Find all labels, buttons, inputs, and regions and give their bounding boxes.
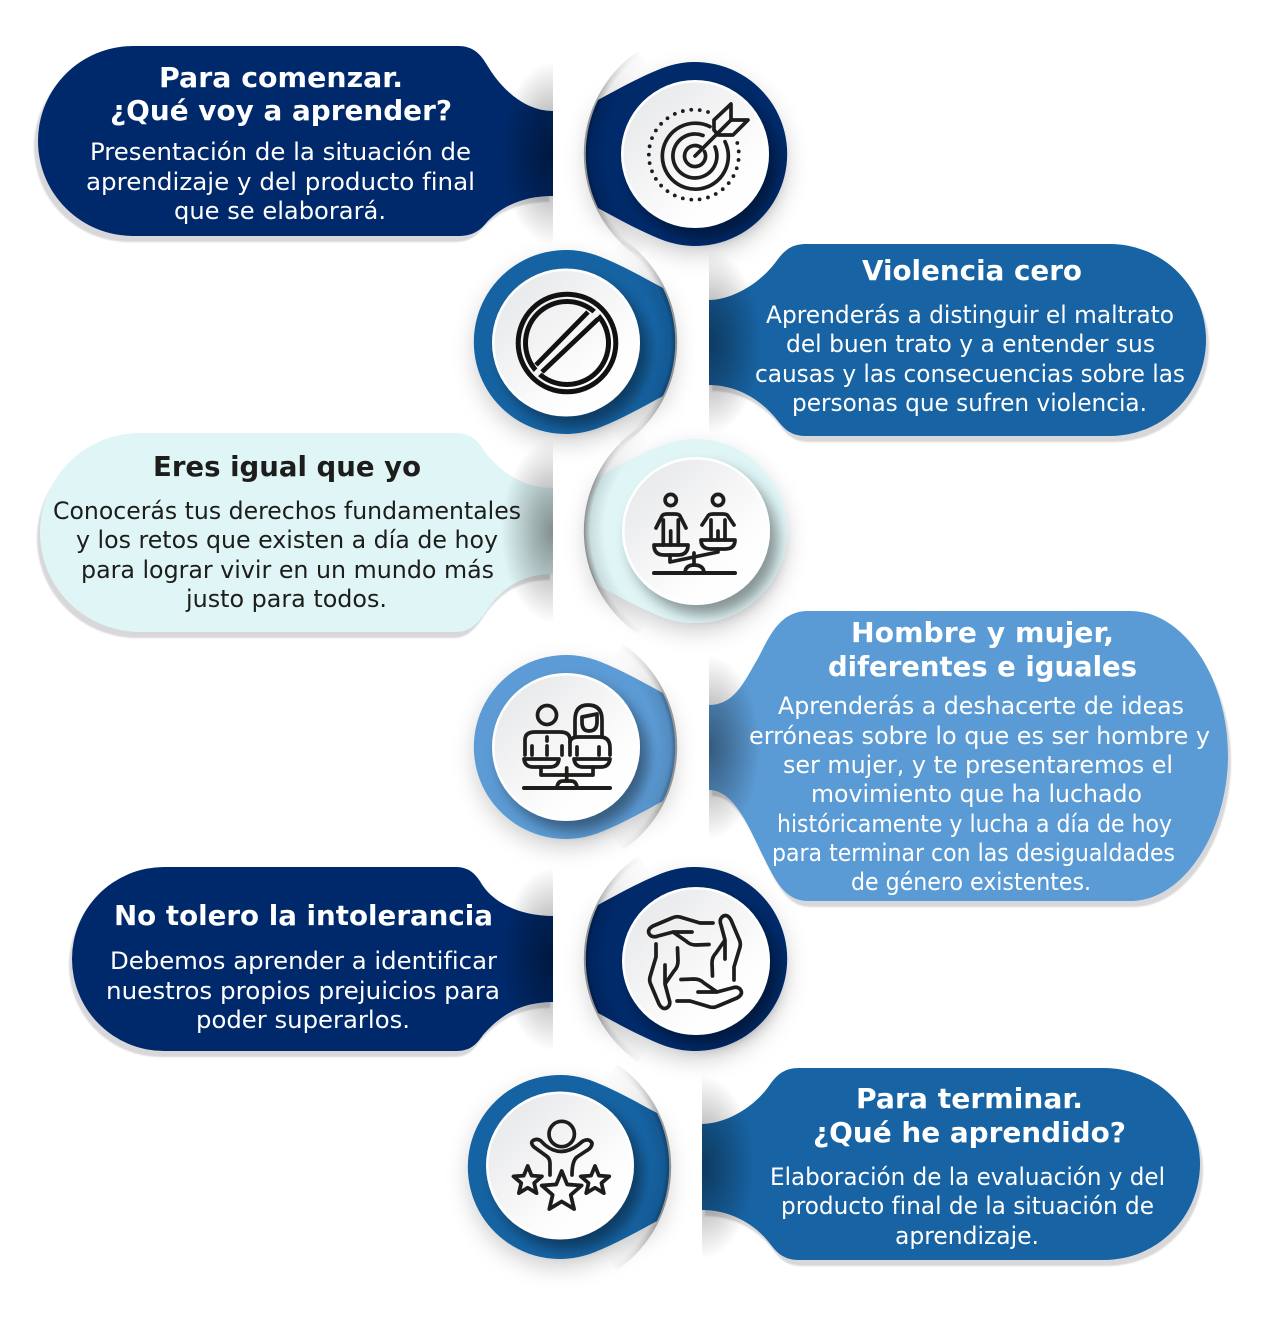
panel: para comenzar [34, 46, 553, 246]
text: no tolero la intolerancia [106, 947, 500, 1034]
text: eres igual que yo: para lograr vivir en un mundo más [81, 556, 494, 584]
panel: hombre y mujer [709, 611, 1231, 907]
text: no tolero la intolerancia: poder superarlos. [196, 1006, 410, 1034]
circle: target [584, 51, 787, 257]
circle: achievement [468, 1064, 671, 1270]
text: hombre y mujer: Aprenderás a deshacerte de ideas [778, 692, 1184, 720]
text: eres igual que yo: y los retos que existen a día de hoy [76, 526, 498, 554]
heading: hombre y mujer: Hombre y mujer, [851, 616, 1114, 649]
text: hombre y mujer: para terminar con las desigualdades [772, 839, 1175, 867]
heading: para terminar [813, 1082, 1126, 1149]
panel: eres igual que yo [37, 433, 553, 638]
icon: person with three stars [513, 1121, 609, 1209]
text: hombre y mujer: ser mujer, y te presentaremos el [783, 751, 1173, 779]
icon: man and woman on scale [524, 705, 610, 788]
panel: violencia cero [709, 244, 1209, 442]
panel: para terminar [702, 1068, 1203, 1266]
heading: hombre y mujer: diferentes e iguales [828, 650, 1137, 683]
heading: para comenzar [110, 61, 452, 127]
text: eres igual que yo: justo para todos. [185, 585, 387, 613]
circle: hands [584, 856, 787, 1062]
text: para terminar: aprendizaje. [895, 1222, 1039, 1250]
text: violencia cero: del buen trato y a entender sus [786, 330, 1155, 358]
icon: two people on seesaw [654, 494, 735, 573]
heading: para comenzar: Para comenzar. [159, 61, 403, 94]
text: para comenzar: aprendizaje y del producto final [86, 168, 475, 196]
text: para terminar: Elaboración de la evaluación y del [770, 1163, 1165, 1191]
heading: hombre y mujer [828, 616, 1137, 683]
heading: eres igual que yo: Eres igual que yo [153, 450, 421, 483]
text: no tolero la intolerancia: Debemos aprender a identificar [110, 947, 497, 975]
circle: equality seesaw [584, 428, 787, 634]
text: para comenzar: Presentación de la situación de [90, 138, 471, 166]
heading: para terminar: Para terminar. [856, 1082, 1083, 1115]
heading: no tolero la intolerancia: No tolero la intolerancia [114, 899, 493, 932]
text: para comenzar: que se elaborará. [174, 197, 386, 225]
heading: para terminar: ¿Qué he aprendido? [813, 1116, 1126, 1149]
icon: four hands in a circle [649, 916, 741, 1008]
text: hombre y mujer: movimiento que ha luchado [811, 780, 1142, 808]
text: hombre y mujer: históricamente y lucha a día de hoy [777, 810, 1172, 838]
icon: target with arrow [649, 104, 748, 200]
text: violencia cero: causas y las consecuencias sobre las [755, 360, 1185, 388]
text: eres igual que yo: Conocerás tus derechos fundamentales [53, 497, 521, 525]
text: hombre y mujer: erróneas sobre lo que es ser hombre y [749, 722, 1210, 750]
circle: man and woman balance [474, 644, 677, 850]
circle: prohibition [474, 239, 677, 445]
text: violencia cero [755, 301, 1185, 417]
text: hombre y mujer: de género existentes. [851, 868, 1091, 896]
icon: prohibition sign [518, 294, 616, 392]
heading: para comenzar: ¿Qué voy a aprender? [110, 94, 452, 127]
text: violencia cero: Aprenderás a distinguir el maltrato [766, 301, 1174, 329]
text: violencia cero: personas que sufren violencia. [792, 389, 1147, 417]
panel: no tolero la intolerancia [69, 867, 553, 1057]
text: para terminar [770, 1163, 1165, 1250]
text: eres igual que yo [53, 497, 521, 613]
text: para terminar: producto final de la situación de [781, 1192, 1154, 1220]
heading: violencia cero: Violencia cero [862, 254, 1082, 287]
text: no tolero la intolerancia: nuestros propios prejuicios para [106, 977, 500, 1005]
text: para comenzar [86, 138, 475, 225]
text: hombre y mujer [749, 692, 1210, 896]
